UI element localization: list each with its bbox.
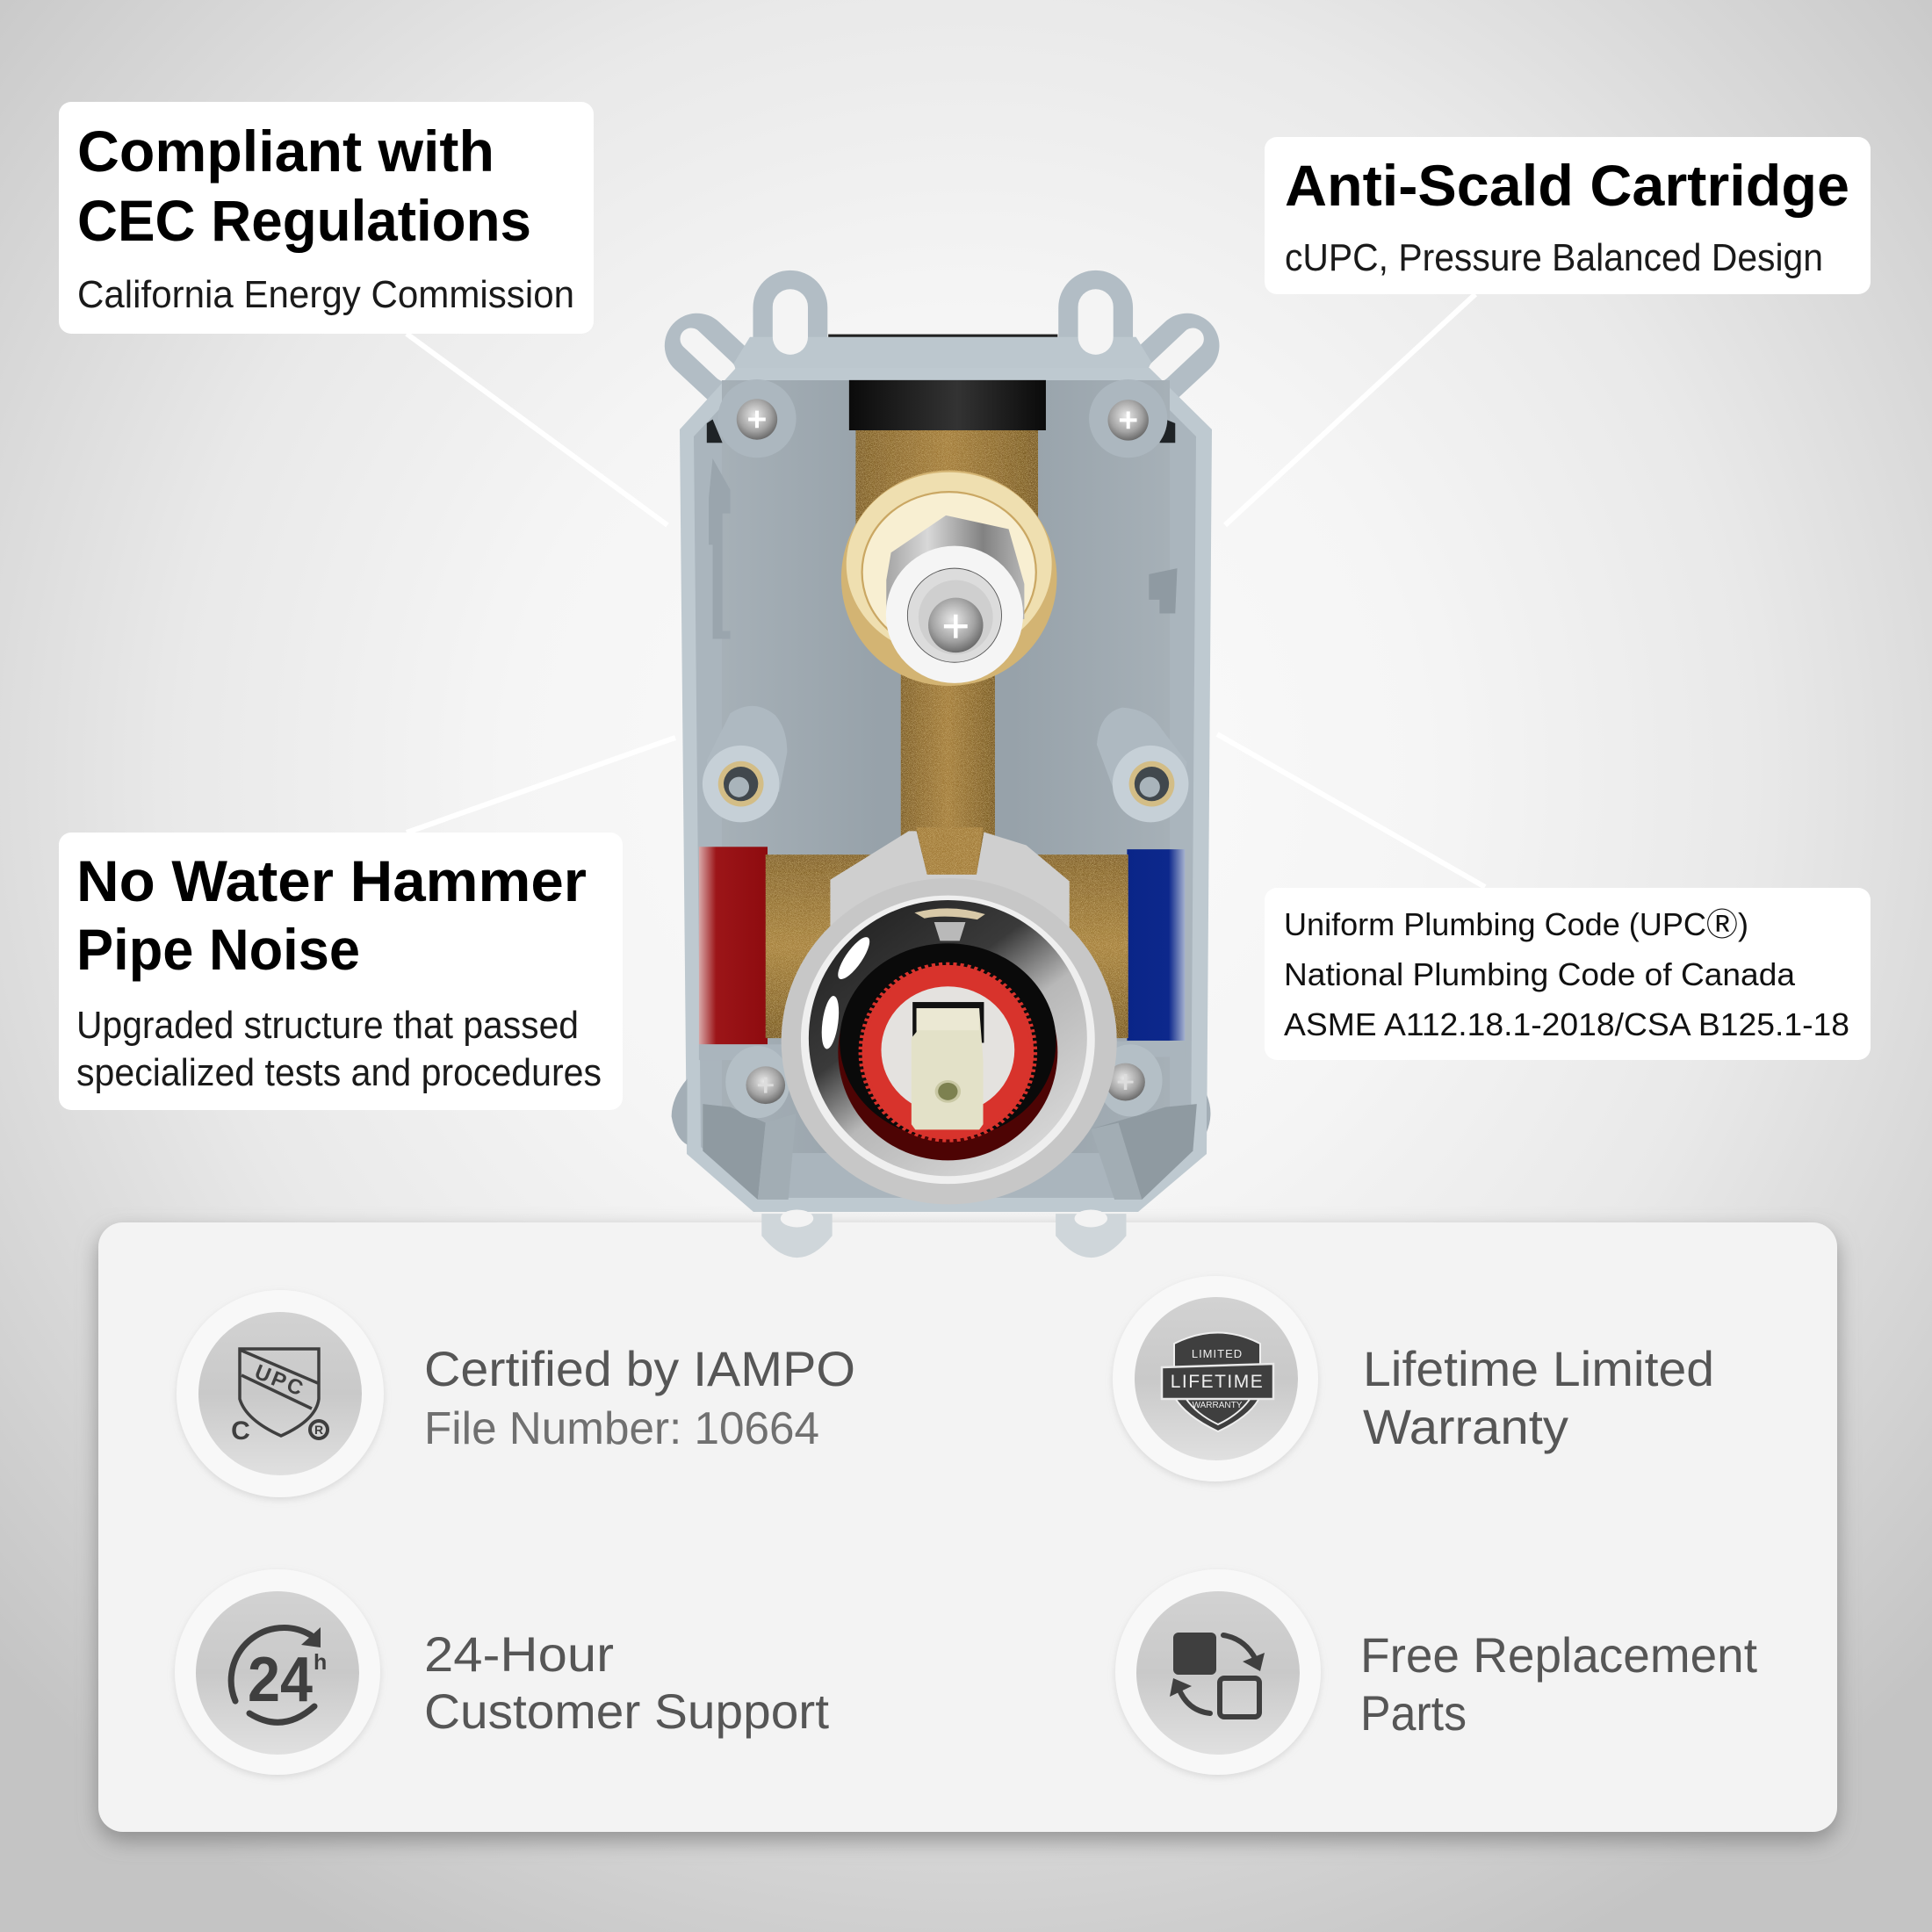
housing collar xyxy=(830,831,1070,948)
red gear xyxy=(862,965,1034,1139)
heading line two: Pipe Noise xyxy=(76,917,360,982)
text: certified by IAMPO xyxy=(424,1341,855,1454)
left wall clip detail xyxy=(709,458,731,638)
leader line: plumbing codes callout to valve xyxy=(1217,734,1485,887)
leader line: anti-scald callout to valve xyxy=(1225,294,1475,525)
callout: no water hammer xyxy=(59,833,623,1110)
panel: certifications xyxy=(98,1222,1837,1832)
text: customer support: Customer Support xyxy=(424,1683,829,1739)
box floor xyxy=(722,380,1170,1153)
left standoff xyxy=(703,706,787,822)
subtext: Upgraded structure that passed xyxy=(76,1004,579,1047)
icon: cUPC badge: C xyxy=(231,1417,250,1445)
mounting tabs top xyxy=(691,306,1193,382)
code line one: Uniform Plumbing Code (UPCⓇ) xyxy=(1284,906,1748,942)
black rubber sleeve xyxy=(849,380,1046,430)
subtext: cUPC, Pressure Balanced Design xyxy=(1285,236,1823,279)
chrome stem xyxy=(886,515,1024,619)
outer gray ring xyxy=(782,878,1117,1204)
gear center xyxy=(881,986,1014,1114)
heading: No Water Hammer xyxy=(76,848,587,913)
text: customer support: 24-Hour xyxy=(424,1626,614,1682)
chrome ring xyxy=(801,896,1095,1184)
brass neck xyxy=(917,827,984,875)
right wall clip detail xyxy=(1149,568,1177,613)
bottom floor wedge xyxy=(703,1104,766,1200)
icon: lifetime warranty xyxy=(1113,1276,1318,1481)
mounting box xyxy=(680,368,1212,1212)
brass upper pipe xyxy=(855,430,1038,572)
gray support under brass xyxy=(699,1044,787,1060)
text: free replacement parts: Parts xyxy=(1360,1685,1467,1741)
details lower half xyxy=(672,827,1210,1204)
cartridge nut washer xyxy=(841,471,1056,686)
icon: lifetime warranty: WARRANTY xyxy=(1193,1401,1243,1410)
heading: Anti-Scald Cartridge xyxy=(1285,153,1849,218)
small nib reflection xyxy=(934,922,965,941)
right side bump xyxy=(1207,1094,1210,1132)
bottom right floor wedge xyxy=(1091,1104,1197,1200)
black gasket xyxy=(840,943,1056,1139)
text: free replacement parts xyxy=(1360,1627,1757,1741)
heading: Compliant with xyxy=(77,119,494,184)
cream ring xyxy=(862,492,1036,652)
heading line two: CEC Regulations xyxy=(77,188,531,253)
cartridge hole xyxy=(935,1080,961,1103)
subtext: California Energy Commission xyxy=(77,273,574,316)
box interior side walls xyxy=(694,380,1196,1198)
icon: 24 hour support: 24 xyxy=(248,1645,313,1715)
leader line: CEC callout to valve xyxy=(407,334,667,525)
gray support right xyxy=(1111,1042,1185,1057)
text: lifetime limited warranty: Lifetime Limited xyxy=(1363,1341,1714,1396)
red hot inlet cap xyxy=(699,847,768,1044)
text: lifetime limited warranty: Warranty xyxy=(1363,1399,1568,1454)
callout: plumbing codes xyxy=(1265,888,1871,1060)
icon: cUPC badge: UPC xyxy=(251,1360,309,1402)
callout: anti-scald cartridge xyxy=(1265,137,1871,294)
code line three: ASME A112.18.1-2018/CSA B125.1-18 xyxy=(1284,1006,1849,1042)
blue cold inlet cap xyxy=(1127,849,1185,1041)
icon: lifetime warranty: LIFETIME xyxy=(1171,1372,1264,1392)
icon: cUPC badge: R xyxy=(314,1423,323,1437)
side bumps xyxy=(672,1079,687,1145)
code line two: National Plumbing Code of Canada xyxy=(1284,956,1796,992)
icon: free replacement parts xyxy=(1115,1569,1321,1775)
callout: CEC regulations xyxy=(59,102,594,334)
text: certified by IAMPO: Certified by IAMPO xyxy=(424,1341,855,1396)
top left screw xyxy=(707,379,797,458)
bottom floor strips xyxy=(758,1114,1142,1200)
text: free replacement parts: Free Replacement xyxy=(1360,1627,1757,1683)
chrome dome xyxy=(809,900,1087,1176)
bottom right screw xyxy=(1098,1044,1163,1116)
valve illustration xyxy=(672,306,1212,1258)
center screw xyxy=(928,598,984,652)
cartridge stem back xyxy=(912,1002,984,1042)
cartridge stem xyxy=(912,1008,984,1129)
white collar xyxy=(886,546,1023,683)
text: lifetime limited warranty xyxy=(1363,1341,1714,1454)
icon: cUPC badge xyxy=(177,1290,384,1497)
right standoff xyxy=(1097,708,1188,822)
text: customer support xyxy=(424,1626,829,1739)
text: certified by IAMPO: File Number: 10664 xyxy=(424,1403,819,1454)
details upper half xyxy=(703,379,1188,858)
chrome highlights xyxy=(819,908,985,1049)
cartridge top face xyxy=(917,1008,979,1030)
mounting tabs bottom xyxy=(761,1209,1126,1258)
leader line: water hammer callout to valve xyxy=(407,738,675,833)
dark red recess xyxy=(838,944,1057,1160)
icon: 24 hour support xyxy=(175,1569,380,1775)
icon: lifetime warranty: LIMITED xyxy=(1192,1347,1243,1360)
top right screw xyxy=(1089,379,1175,458)
brass lower pipe xyxy=(901,646,995,858)
subtext line two: specialized tests and procedures xyxy=(76,1051,602,1094)
icon: 24 hour support: h xyxy=(314,1650,327,1675)
bottom left screw xyxy=(725,1046,789,1118)
brass horizontal body xyxy=(766,854,1128,1038)
